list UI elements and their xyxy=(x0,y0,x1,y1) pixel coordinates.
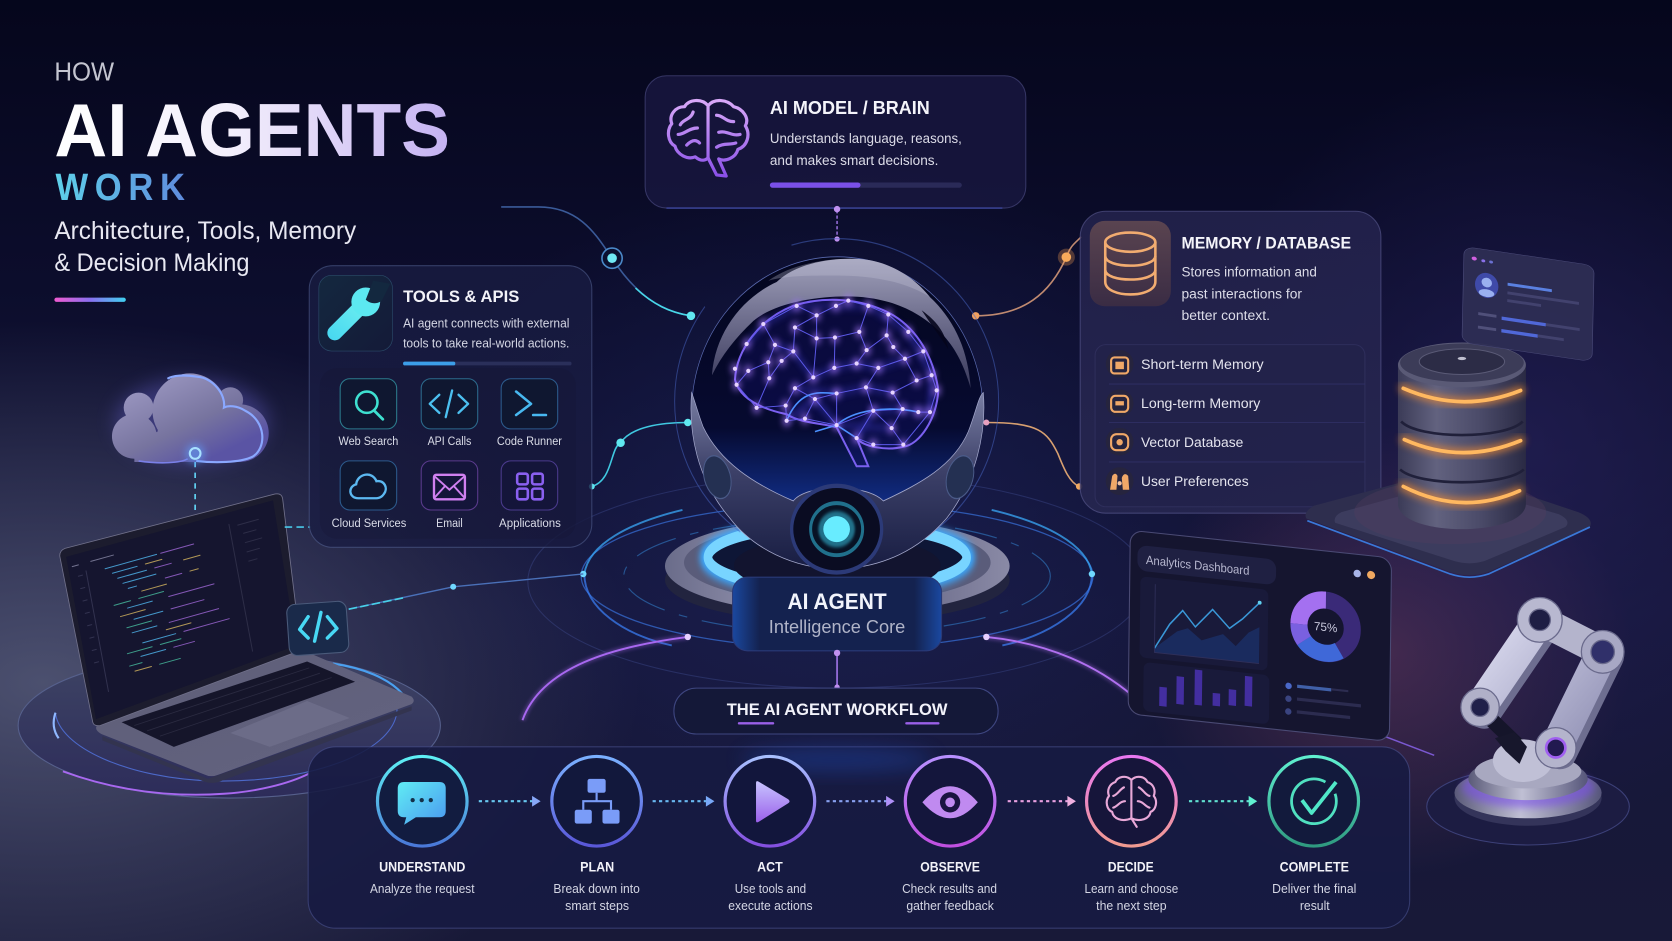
laptop platform xyxy=(18,653,440,798)
shell xyxy=(691,393,984,569)
arrow: decide to complete xyxy=(1189,796,1257,807)
robot arms xyxy=(1480,620,1607,752)
label: ai agent: AI AGENT xyxy=(787,589,887,614)
core label xyxy=(733,577,942,651)
step: plan: Break down into xyxy=(553,881,640,896)
row: user preferences xyxy=(1106,467,1249,495)
step: act xyxy=(725,756,815,913)
connector: core to workflow xyxy=(834,650,840,690)
title block xyxy=(54,59,450,302)
step: act: ACT xyxy=(757,859,783,875)
keyboard xyxy=(122,661,355,747)
connector: tools to laptop xyxy=(285,526,310,528)
tower base xyxy=(1306,469,1591,577)
tile: email: Email xyxy=(436,517,463,530)
tower glow rings xyxy=(1403,388,1521,503)
step: observe: OBSERVE xyxy=(920,859,980,875)
step: act: execute actions xyxy=(728,898,813,913)
row: short-term memory: Short-term Memory xyxy=(1141,356,1264,372)
connector: code chip to core xyxy=(349,574,583,609)
tower cap xyxy=(1398,342,1526,387)
analytics dashboard xyxy=(1128,530,1392,741)
row: user preferences: User Preferences xyxy=(1141,473,1249,489)
robot arm xyxy=(1427,597,1629,845)
panel: workflow xyxy=(308,747,1410,928)
step: observe: Check results and xyxy=(902,881,997,896)
neural brain xyxy=(735,300,938,466)
dashboard list xyxy=(1285,682,1361,722)
row: long-term memory: Long-term Memory xyxy=(1141,395,1260,411)
connector: tools to core xyxy=(501,207,695,320)
progress bar: ai model xyxy=(770,182,962,188)
step: complete: Deliver the final xyxy=(1272,881,1356,896)
icon: database tile xyxy=(1090,221,1171,306)
dome highlight xyxy=(712,259,971,388)
connector: memory lower to core xyxy=(983,420,1082,490)
core eye xyxy=(792,486,882,573)
arrow: act to observe xyxy=(826,796,895,807)
tile: web search xyxy=(339,379,398,448)
row: short-term memory xyxy=(1106,350,1264,378)
panel: ai model brain xyxy=(645,76,1026,208)
heading: workflow: THE AI AGENT WORKFLOW xyxy=(727,700,948,719)
robot dome xyxy=(1493,739,1553,782)
description: tools: tools to take real-world actions. xyxy=(403,335,569,350)
connector: purple energy left xyxy=(522,634,691,720)
tile: cloud services: Cloud Services xyxy=(332,517,406,530)
step: understand: Analyze the request xyxy=(370,881,475,896)
shell side lenses xyxy=(698,449,979,505)
step: complete xyxy=(1269,756,1358,913)
donut chart xyxy=(1299,597,1353,656)
core sphere illustration xyxy=(665,239,1010,623)
outer halo ring xyxy=(675,239,999,564)
accent line xyxy=(54,298,126,302)
step: observe: gather feedback xyxy=(906,898,994,913)
laptop base xyxy=(96,652,414,776)
step: complete: COMPLETE xyxy=(1280,859,1349,875)
description: memory: past interactions for xyxy=(1181,286,1302,302)
row: long-term memory xyxy=(1106,389,1260,417)
step: understand: UNDERSTAND xyxy=(379,859,465,875)
arrow: plan to act xyxy=(653,796,714,807)
step: decide xyxy=(1084,756,1178,913)
arrow: observe to decide xyxy=(1008,796,1076,807)
connector: tools lower to core xyxy=(589,419,692,489)
step: decide: Learn and choose xyxy=(1084,881,1178,896)
step: observe xyxy=(902,756,997,913)
step: plan: smart steps xyxy=(565,898,629,913)
tile: web search: Web Search xyxy=(339,435,398,448)
tile: cloud services xyxy=(332,461,406,530)
connector: memory to core xyxy=(972,237,1081,320)
tile: code runner: Code Runner xyxy=(497,435,562,448)
step: decide: the next step xyxy=(1096,898,1167,913)
connector: cloud to laptop xyxy=(194,462,196,512)
tile: email xyxy=(421,461,478,530)
step: plan xyxy=(552,756,641,913)
panel: memory database xyxy=(1080,211,1381,513)
trackpad xyxy=(230,701,350,747)
floating profile card xyxy=(1462,246,1594,362)
robot gripper xyxy=(1495,732,1527,764)
label: intelligence core: Intelligence Core xyxy=(769,617,905,637)
tile: code runner xyxy=(497,379,562,448)
main title: AI AGENTS xyxy=(54,88,450,172)
description: tools xyxy=(403,316,569,350)
window dots xyxy=(1353,569,1375,579)
heading: memory: MEMORY / DATABASE xyxy=(1181,234,1351,253)
laptop xyxy=(60,494,414,783)
pedestal xyxy=(665,517,1010,623)
cloud xyxy=(112,373,269,464)
tile: api calls xyxy=(421,379,478,448)
heading: tools and apis: TOOLS & APIS xyxy=(403,287,519,306)
description: memory xyxy=(1181,263,1317,323)
dashboard title xyxy=(1137,545,1276,585)
tile: applications: Applications xyxy=(499,517,561,530)
tile: api calls: API Calls xyxy=(428,435,471,448)
step: complete: result xyxy=(1300,898,1330,913)
progress bar: tools xyxy=(403,362,572,365)
database tower xyxy=(1306,342,1591,577)
connector: purple energy right xyxy=(983,634,1434,755)
eyebrow: how: HOW xyxy=(54,59,115,87)
row: vector database: Vector Database xyxy=(1141,434,1244,450)
step: act: Use tools and xyxy=(735,881,806,896)
description: ai model: and makes smart decisions. xyxy=(770,152,938,168)
description: memory: better context. xyxy=(1181,307,1270,323)
subtitle line one: Architecture, Tools, Memory xyxy=(54,217,357,245)
donut value: 75% xyxy=(1314,620,1338,635)
heading: ai model: AI MODEL / BRAIN xyxy=(770,98,930,118)
panel: tools and apis xyxy=(309,266,592,547)
icon: brain xyxy=(668,101,748,176)
description: ai model xyxy=(770,130,962,168)
step: decide: DECIDE xyxy=(1108,859,1154,875)
robot platform xyxy=(1427,754,1629,845)
line chart xyxy=(1139,576,1268,671)
tower body xyxy=(1398,363,1526,529)
workflow heading pill xyxy=(674,688,998,734)
bar chart xyxy=(1143,662,1270,724)
glass globe xyxy=(692,257,983,567)
robot joints xyxy=(1461,597,1624,768)
screen xyxy=(60,494,301,726)
arrow: understand to plan xyxy=(479,796,541,807)
row: vector database xyxy=(1106,428,1244,456)
dashboard title: Analytics Dashboard xyxy=(1146,553,1250,578)
code chip icon xyxy=(286,601,349,656)
step: understand xyxy=(370,756,475,896)
description: memory: Stores information and xyxy=(1181,263,1317,279)
subtitle line two: & Decision Making xyxy=(54,249,250,277)
title: work: WORK xyxy=(55,165,192,208)
description: ai model: Understands language, reasons, xyxy=(770,130,962,146)
memory list xyxy=(1095,345,1365,507)
tile: applications xyxy=(499,461,561,530)
orbit rings around core xyxy=(528,475,1146,688)
description: tools: AI agent connects with external xyxy=(403,316,569,331)
connector: brain to core xyxy=(834,206,840,242)
step: plan: PLAN xyxy=(580,859,614,875)
icon: wrench tile xyxy=(319,275,392,351)
code editor lines xyxy=(72,515,281,695)
